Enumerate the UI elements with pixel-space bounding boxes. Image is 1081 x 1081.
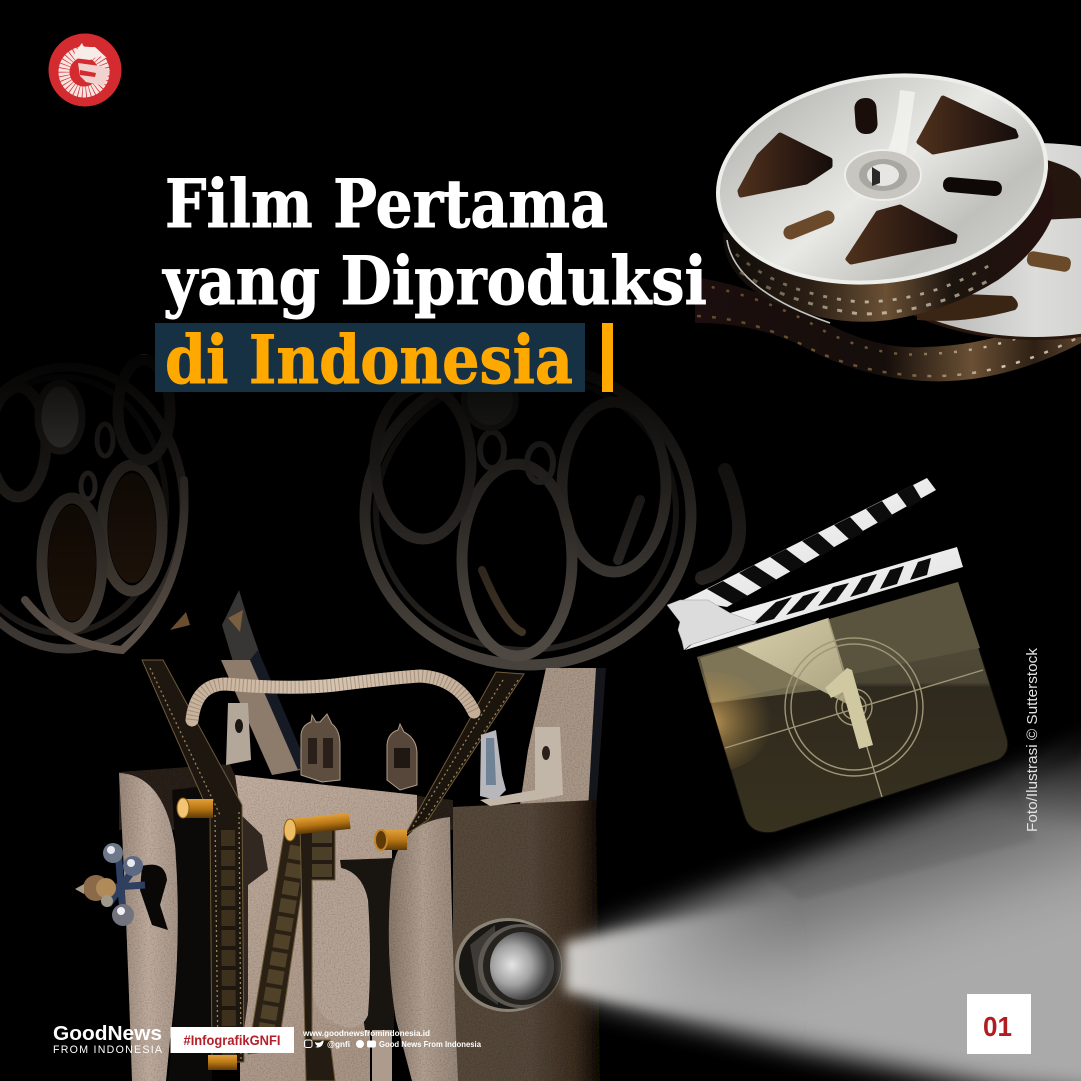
title line 2: yang Diproduksi <box>162 242 707 320</box>
page number: 01 <box>983 1011 1012 1042</box>
right dark body <box>453 800 600 1081</box>
clapperboard <box>652 478 1008 833</box>
title highlight bar <box>155 323 585 392</box>
title line 3: di Indonesia <box>165 321 573 399</box>
back reel <box>855 143 1081 340</box>
film reels, top right <box>695 53 1081 381</box>
dark left recess <box>168 785 212 1081</box>
centre panel <box>235 775 417 1081</box>
page name text: Good News From Indonesia <box>379 1040 482 1049</box>
right stone panel <box>389 817 458 1081</box>
upper clapstick <box>683 478 936 607</box>
icon: youtube <box>367 1040 376 1048</box>
brand wordmark <box>53 1022 163 1056</box>
board <box>697 582 1008 833</box>
front reel film band <box>723 165 1054 323</box>
front reel disc <box>702 53 1062 305</box>
hashtag badge: #InfografikGNFI <box>184 1033 280 1048</box>
social handles <box>304 1040 482 1049</box>
handle text: @gnfi <box>327 1040 350 1049</box>
icon: twitter <box>315 1041 324 1048</box>
icon: instagram <box>304 1040 312 1048</box>
centre shadow <box>236 810 268 1060</box>
vertical film strip <box>300 822 335 1081</box>
middle film strip <box>248 828 311 1054</box>
countdown crosshair and circles <box>725 618 983 797</box>
website: www.goodnewsfromindonesia.id <box>302 1029 430 1038</box>
loose film strip <box>695 277 1081 381</box>
reel windows <box>740 98 1016 262</box>
title <box>155 165 707 399</box>
countdown wedge <box>737 618 853 707</box>
centre lozenge <box>312 867 370 1028</box>
reel hub <box>845 150 921 200</box>
left side panel <box>119 773 178 1081</box>
title line 1: Film Pertama <box>165 165 608 243</box>
reel top fade <box>0 355 780 645</box>
film strips <box>142 660 524 1081</box>
brand wordmark: FROM INDONESIA <box>53 1044 163 1056</box>
photo credit: Foto/Ilustrasi © Sutterstock <box>1025 647 1041 832</box>
countdown number 1 <box>825 668 873 749</box>
lower centre blocks <box>372 1030 392 1081</box>
gold rollers <box>177 798 407 1070</box>
hashtag badge <box>170 1027 294 1053</box>
logo <box>48 34 122 106</box>
dim right film reel <box>365 365 739 665</box>
hose <box>192 676 474 720</box>
top of case <box>119 764 453 830</box>
footer <box>53 994 1031 1056</box>
page number <box>967 994 1031 1054</box>
vacuum tubes <box>301 714 417 790</box>
right film strip <box>405 672 524 835</box>
clapperboard reflection <box>762 772 1035 900</box>
title cursor <box>602 323 613 392</box>
left film strip <box>142 660 244 1062</box>
reel slots <box>854 97 878 135</box>
projector <box>75 590 606 1081</box>
back arms <box>170 590 606 810</box>
clapper hinge <box>667 600 757 650</box>
brackets <box>226 703 563 806</box>
brand wordmark: GoodNews <box>53 1022 162 1045</box>
projector light beam <box>565 730 1081 1081</box>
lower clapstick <box>685 547 963 650</box>
icon: facebook <box>356 1040 364 1048</box>
dim left film reel <box>0 360 184 650</box>
lens <box>455 918 562 1012</box>
side knob <box>75 843 168 930</box>
